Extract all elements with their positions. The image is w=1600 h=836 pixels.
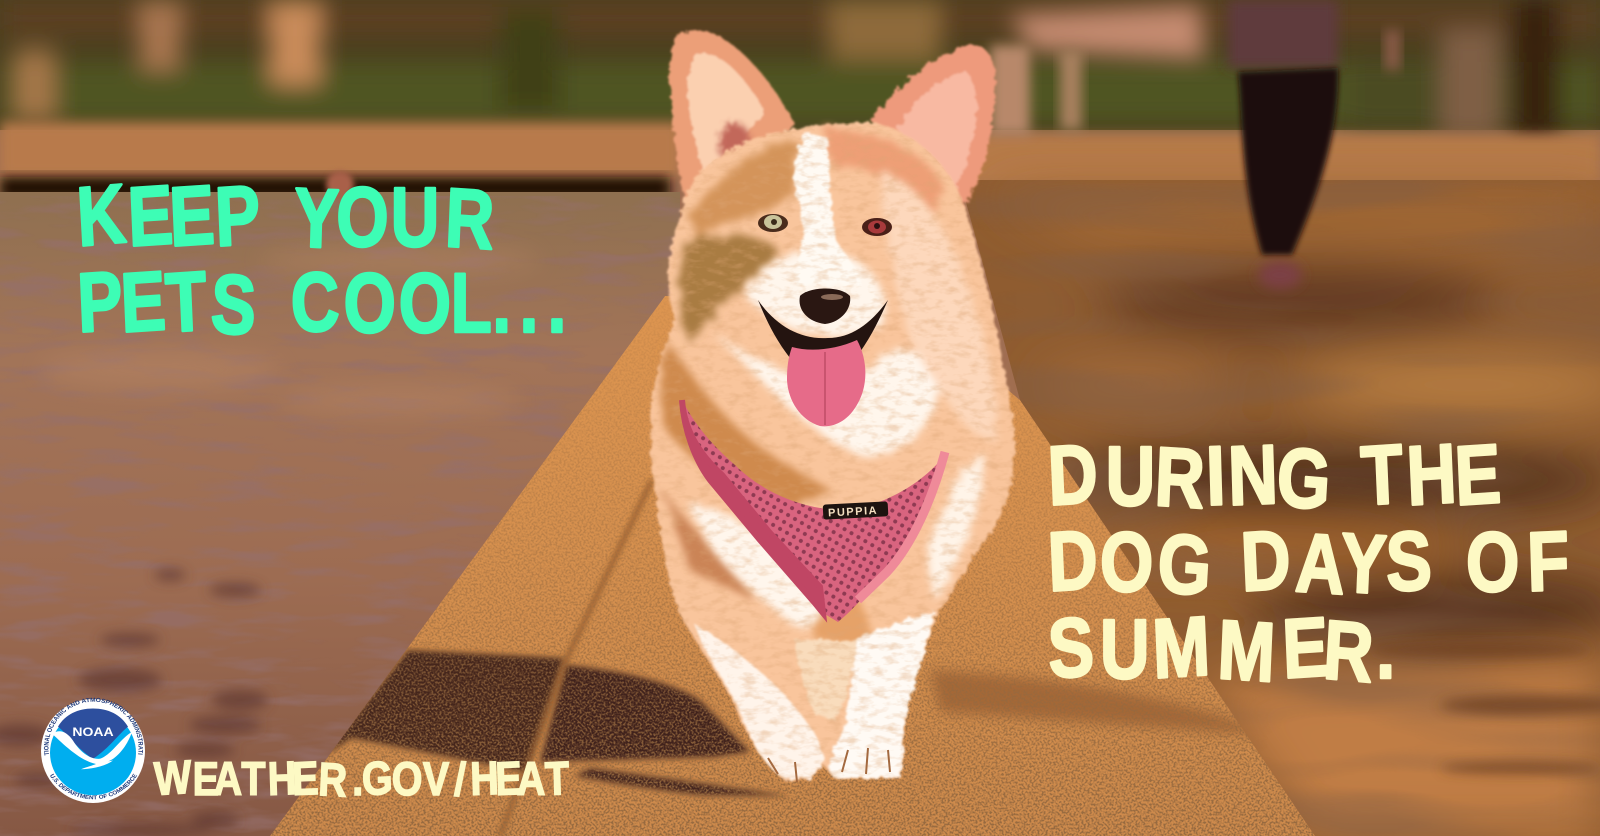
website address: WEATHER.GOV/HEAT <box>153 752 570 808</box>
corgi dog <box>640 30 1020 782</box>
dog: white chest and face <box>690 170 996 626</box>
dog: fur strand texture <box>640 120 1020 780</box>
background: path and dark water edge <box>0 122 1600 199</box>
dog: nose <box>800 288 850 324</box>
right text line 3: SUMMER. <box>1046 600 1395 701</box>
dog: left ear <box>669 30 795 215</box>
headline line 1: KEEP YOUR <box>75 167 496 268</box>
ledge: shadow under left slab <box>325 650 564 772</box>
harness: brand tag <box>823 501 888 520</box>
ledge: stone surface <box>270 296 1315 836</box>
harness: mesh panel <box>682 400 945 622</box>
dog: paw toe marks <box>768 748 890 782</box>
dog: brown fur on cheek and shoulders <box>660 130 945 650</box>
dog: tongue centre crease <box>824 352 826 425</box>
logo: white disc <box>41 699 145 803</box>
logo: bottom ring text: U.S. DEPARTMENT OF COMMERCE <box>50 774 138 800</box>
dog: body silhouette <box>650 122 1014 782</box>
dog: white forehead blaze <box>794 132 862 285</box>
ledge: soft shade right of dog <box>930 670 1260 735</box>
headline: during the dog days of summer <box>1046 427 1570 701</box>
harness: left binding <box>682 400 823 613</box>
dog: nose highlight <box>821 294 843 300</box>
headline line 2: PETS COOL... <box>76 254 566 354</box>
dog: front legs <box>695 612 935 780</box>
right text line 1: DURING THE <box>1046 427 1503 528</box>
logo: upper dark blue field <box>58 709 128 759</box>
harness: right binding <box>858 452 945 600</box>
dog: tongue <box>787 340 865 426</box>
dog: mouth <box>758 300 888 358</box>
dog: pink harness <box>682 400 945 622</box>
ledge: slab seam <box>500 480 652 836</box>
background: water surface <box>0 171 680 836</box>
headline: keep your pets cool <box>75 167 566 354</box>
NOAA logo <box>41 698 145 803</box>
background: blurred pedestrian and bench <box>990 0 1400 289</box>
logo: NOAA wordmark: NOAA <box>72 725 114 739</box>
stone ledge <box>270 296 1315 836</box>
logo: top ring text: NATIONAL OCEANIC AND ATMOSPHERIC ADMINISTRATION <box>44 698 143 756</box>
ledge: thin paw shadow <box>575 768 790 796</box>
logo: lower light blue field <box>50 710 136 795</box>
dog: right ear <box>870 45 996 208</box>
dog: left eye <box>758 214 788 232</box>
background: distant park with trees and lawn <box>0 0 1600 140</box>
ledge: gravel texture <box>270 296 1315 836</box>
background: right walkway with tree shadows <box>960 180 1600 836</box>
dog: right eye <box>862 218 892 236</box>
right text line 2: DOG DAYS OF <box>1046 513 1570 614</box>
logo: white bird swoop <box>52 731 132 769</box>
harness: brand tag: PUPPIA <box>828 505 878 519</box>
ledge: dog shadow <box>540 665 750 762</box>
